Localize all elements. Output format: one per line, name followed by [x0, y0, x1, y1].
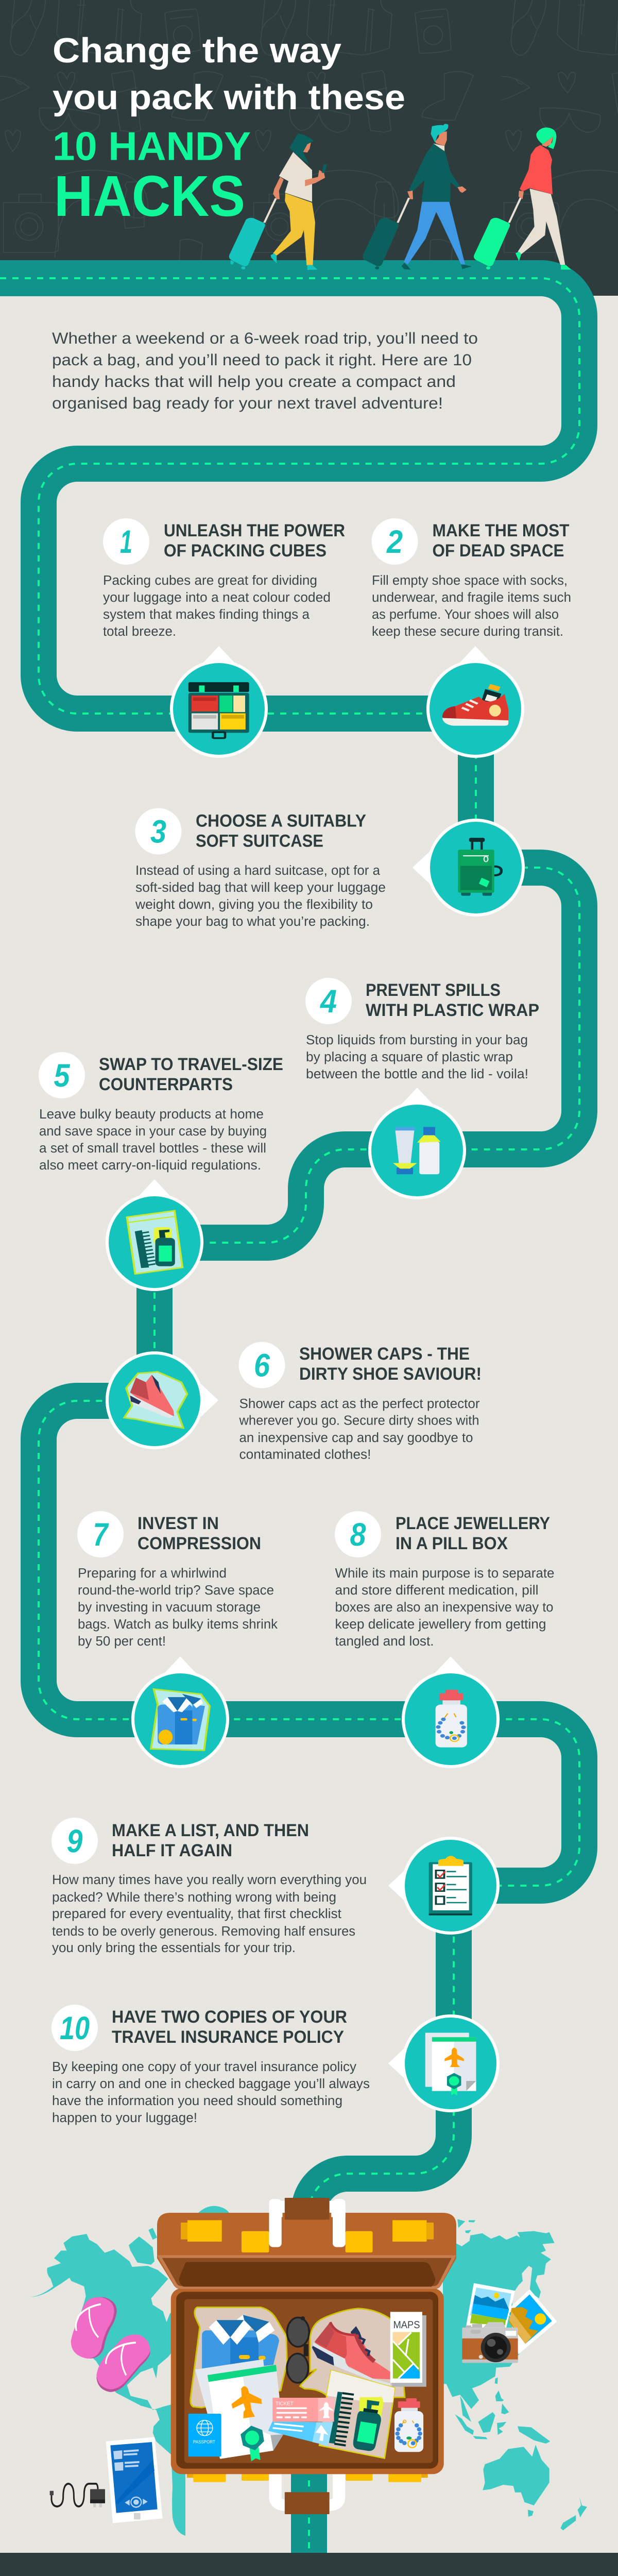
heading 2: [433, 521, 570, 561]
body 7: Preparing for a whirlwind: [78, 1565, 227, 1581]
number badge 1: [103, 518, 149, 565]
hack 1: [103, 518, 345, 639]
body 10: happen to your luggage!: [52, 2110, 197, 2125]
number badge 3: [135, 808, 181, 854]
body 1: [103, 572, 331, 639]
hack 6: [239, 1342, 482, 1462]
heading 10: HAVE TWO COPIES OF YOUR: [112, 2007, 347, 2027]
body 3: shape your bag to what you’re packing.: [135, 913, 370, 929]
heading 6: [299, 1344, 482, 1384]
heading 3: CHOOSE A SUITABLY: [196, 811, 366, 831]
body 6: wherever you go. Secure dirty shoes with: [239, 1413, 479, 1428]
number badge 4: 4: [319, 984, 337, 1020]
passport: PASSPORT: [193, 2439, 215, 2445]
rear zip bag with comb and bottle: [319, 2370, 394, 2459]
body 7: [78, 1565, 278, 1649]
icon: travel-size bag: [106, 1179, 203, 1291]
heading 2: OF DEAD SPACE: [433, 541, 564, 561]
number badge 10: [52, 2005, 98, 2051]
body 7: round-the-world trip? Save space: [78, 1582, 274, 1598]
number badge 2: 2: [386, 524, 403, 560]
body 8: tangled and lost.: [335, 1633, 434, 1649]
body 4: by placing a square of plastic wrap: [306, 1049, 513, 1064]
title: 10 HANDY: [53, 124, 251, 169]
plane tickets: TICKET: [276, 2401, 294, 2406]
icon: shoe with perfume: [426, 646, 524, 758]
heading 3: [196, 811, 366, 851]
body 1: total breeze.: [103, 623, 176, 639]
heading 10: TRAVEL INSURANCE POLICY: [112, 2027, 344, 2047]
heading 3: SOFT SUITCASE: [196, 832, 323, 851]
number badge 2: [372, 518, 418, 565]
body 9: tends to be overly generous. Removing half ensures: [52, 1923, 355, 1939]
body 5: [39, 1106, 267, 1173]
icon: compression bag shirt: [131, 1656, 229, 1768]
body 10: [52, 2059, 370, 2125]
body 10: have the information you need should something: [52, 2093, 342, 2108]
heading 9: MAKE A LIST, AND THEN: [112, 1821, 309, 1840]
heading 1: [164, 521, 345, 561]
body 7: by investing in vacuum storage: [78, 1599, 261, 1615]
icon: shoe in shower cap: [106, 1351, 218, 1449]
body 3: soft-sided bag that will keep your luggage: [135, 879, 386, 895]
heading 4: [366, 980, 539, 1020]
body 4: Stop liquids from bursting in your bag: [306, 1032, 528, 1047]
number badge 4: [305, 978, 352, 1024]
suitcase body: [171, 2289, 444, 2474]
body 7: bags. Watch as bulky items shrink: [78, 1616, 278, 1632]
suitcase handle: [276, 2207, 339, 2505]
heading 5: COUNTERPARTS: [99, 1075, 233, 1094]
body 4: [306, 1032, 528, 1081]
body 3: [135, 862, 386, 929]
intro text: [52, 329, 478, 412]
compressed shoe bag: [300, 2309, 405, 2397]
body 9: How many times have you really worn everything you: [52, 1872, 367, 1887]
body 2: [372, 572, 571, 639]
body 2: as perfume. Your shoes will also: [372, 606, 559, 622]
number badge 7: 7: [93, 1517, 109, 1553]
body 2: underwear, and fragile items such: [372, 589, 571, 605]
body 5: also meet carry-on-liquid regulations.: [39, 1157, 261, 1173]
number badge 1: 1: [120, 524, 132, 560]
open suitcase: [157, 2198, 456, 2514]
hack 7: [77, 1511, 278, 1649]
icon: pill box jewellery: [402, 1656, 500, 1768]
body 5: a set of small travel bottles - these will: [39, 1140, 266, 1156]
heading 8: [396, 1514, 550, 1553]
header panel: [0, 0, 618, 296]
heading 8: IN A PILL BOX: [396, 1534, 508, 1553]
body 1: Packing cubes are great for dividing: [103, 572, 317, 588]
heading 5: SWAP TO TRAVEL-SIZE: [99, 1055, 283, 1074]
photos and camera: [462, 2283, 557, 2363]
body 1: system that makes finding things a: [103, 606, 310, 622]
body 8: While its main purpose is to separate: [335, 1565, 554, 1581]
intro text: pack a bag, and you’ll need to pack it right. Here are 10: [52, 351, 472, 369]
body 6: contaminated clothes!: [239, 1447, 371, 1462]
body 6: [239, 1396, 480, 1462]
number badge 7: [77, 1511, 124, 1557]
hack 3: [135, 808, 386, 929]
heading 7: [138, 1514, 261, 1553]
body 9: you only bring the essentials for your trip.: [52, 1940, 296, 1955]
bottom latches: [187, 2473, 428, 2482]
icon: insurance policy documents: [388, 2014, 500, 2112]
number badge 3: 3: [150, 814, 166, 850]
bottom strap: [285, 2492, 330, 2514]
icon: soft suitcase: [413, 819, 525, 917]
body 8: keep delicate jewellery from getting: [335, 1616, 546, 1632]
body 1: your luggage into a neat colour coded: [103, 589, 331, 605]
heading 5: [99, 1055, 283, 1094]
body 2: Fill empty shoe space with socks,: [372, 572, 568, 588]
map booklet: [390, 2312, 426, 2387]
passport: [188, 2414, 221, 2456]
title: HACKS: [54, 164, 245, 228]
hack 2: [372, 518, 571, 639]
body 10: in carry on and one in checked baggage you’ll always: [52, 2076, 370, 2091]
title: [53, 31, 405, 228]
hack 10: [52, 2005, 370, 2125]
number badge 9: 9: [67, 1823, 82, 1859]
plane tickets: [268, 2398, 334, 2446]
pill bottle with jewellery: [394, 2398, 423, 2452]
body 8: boxes are also an inexpensive way to: [335, 1599, 553, 1615]
title: Change the way: [53, 31, 341, 70]
number badge 5: [39, 1052, 85, 1098]
number badge 8: 8: [350, 1517, 366, 1553]
hack 8: [335, 1511, 554, 1649]
world map: [30, 2206, 587, 2536]
body 6: Shower caps act as the perfect protector: [239, 1396, 480, 1411]
body 5: and save space in your case by buying: [39, 1123, 267, 1139]
flip flops: [71, 2297, 150, 2392]
icon: packing cubes suitcase: [170, 646, 268, 758]
travel documents: [195, 2359, 283, 2461]
hack 4: [305, 978, 539, 1081]
title: you pack with these: [53, 78, 405, 117]
heading 7: INVEST IN: [138, 1514, 219, 1533]
suitcase lid: [157, 2198, 456, 2289]
icon: checklist: [388, 1837, 500, 1935]
heading 1: UNLEASH THE POWER: [164, 521, 345, 540]
body 7: by 50 per cent!: [78, 1633, 166, 1649]
hack 5: [39, 1052, 283, 1173]
intro text: organised bag ready for your next travel adventure!: [52, 394, 443, 412]
body 4: between the bottle and the lid - voila!: [306, 1066, 528, 1081]
tablet and charger: [50, 2437, 163, 2523]
intro text: handy hacks that will help you create a compact and: [52, 372, 456, 391]
footer panel: [0, 2553, 618, 2576]
body 9: prepared for every eventuality, that first checklist: [52, 1906, 342, 1921]
heading 7: COMPRESSION: [138, 1534, 261, 1553]
heading 8: PLACE JEWELLERY: [396, 1514, 550, 1533]
traveller: man in jacket: [363, 124, 472, 269]
number badge 10: 10: [60, 2010, 90, 2046]
number badge 8: [335, 1511, 381, 1557]
compressed shirt bag: [191, 2307, 287, 2408]
body 9: [52, 1872, 367, 1955]
hack 9: [52, 1818, 367, 1955]
number badge 9: [52, 1818, 98, 1864]
heading 10: [112, 2007, 347, 2047]
heading 2: MAKE THE MOST: [433, 521, 570, 540]
heading 1: OF PACKING CUBES: [164, 541, 327, 561]
body 3: Instead of using a hard suitcase, opt for a: [135, 862, 381, 878]
body 2: keep these secure during transit.: [372, 623, 563, 639]
number badge 6: [239, 1342, 285, 1388]
travellers walking: [229, 124, 571, 270]
heading 6: SHOWER CAPS - THE: [299, 1344, 470, 1364]
icon: bottles with plastic wrap: [368, 1088, 466, 1199]
heading 4: WITH PLASTIC WRAP: [366, 1001, 539, 1020]
intro text: Whether a weekend or a 6-week road trip, you’ll need to: [52, 329, 478, 347]
traveller: woman in red: [474, 127, 571, 269]
body 8: [335, 1565, 554, 1649]
body 5: Leave bulky beauty products at home: [39, 1106, 264, 1122]
heading 4: PREVENT SPILLS: [366, 980, 501, 1000]
heading 9: HALF IT AGAIN: [112, 1841, 232, 1860]
heading 9: [112, 1821, 309, 1860]
heading 6: DIRTY SHOE SAVIOUR!: [299, 1364, 482, 1384]
number badge 6: 6: [254, 1348, 270, 1384]
body 6: an inexpensive cap and say goodbye to: [239, 1430, 473, 1445]
body 3: weight down, giving you the flexibility to: [135, 896, 373, 912]
body 9: packed? While there’s nothing wrong with being: [52, 1889, 336, 1905]
body 8: and store different medication, pill: [335, 1582, 539, 1598]
sunglasses: [287, 2316, 309, 2385]
traveller: woman in hijab: [229, 133, 327, 270]
body 10: By keeping one copy of your travel insurance policy: [52, 2059, 356, 2074]
MAPS label: MAPS: [393, 2319, 420, 2331]
number badge 5: 5: [54, 1058, 70, 1094]
